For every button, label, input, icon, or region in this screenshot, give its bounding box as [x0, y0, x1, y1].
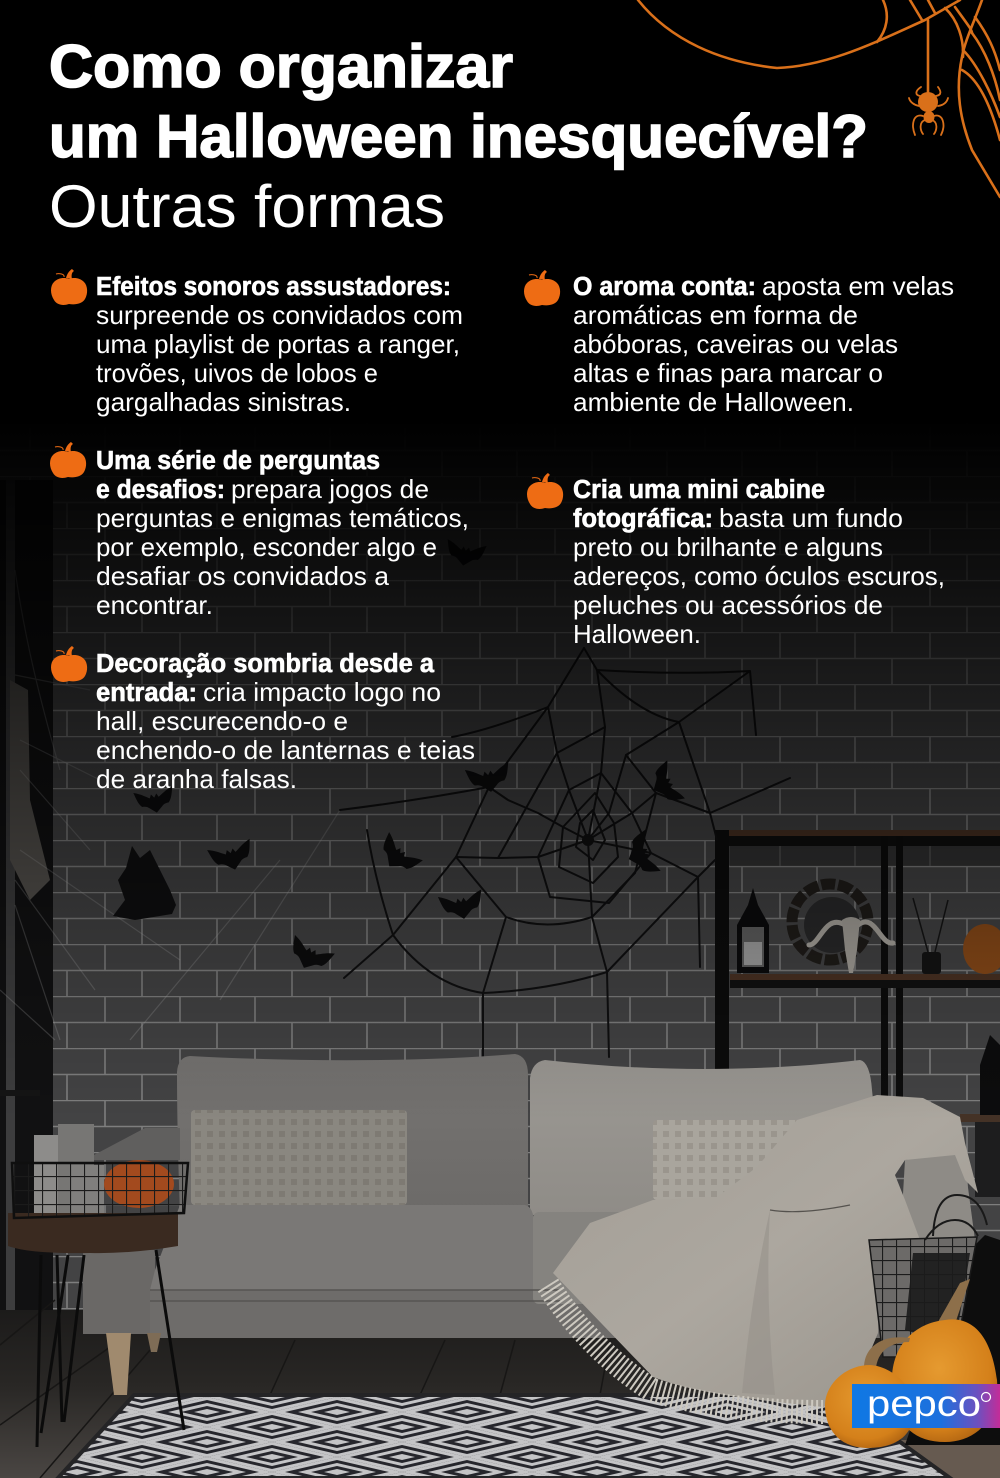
tip text: photo booth: fotográfica: — [573, 505, 713, 533]
sofa back cushion left — [177, 1054, 528, 1215]
title — [49, 33, 868, 240]
tip text: entrance decoration: hall, escurecendo-o e — [96, 706, 348, 736]
sofa — [83, 1054, 975, 1395]
sofa seat cushion right — [533, 1212, 833, 1304]
icon: pumpkin — [51, 269, 87, 305]
title: Como organizar — [49, 33, 513, 100]
wire basket right — [869, 1195, 987, 1357]
lower shelf lantern — [980, 1035, 1000, 1115]
shelf: lantern — [737, 888, 769, 973]
throw blanket — [548, 1095, 978, 1412]
tip text: aroma: aromáticas em forma de — [573, 300, 858, 330]
tip text: photo booth — [573, 476, 945, 649]
tip text: sound effects — [96, 273, 463, 417]
tip text: sound effects: Efeitos sonoros assustadores: — [96, 273, 451, 301]
tip text: questions and challenges: e desafios: — [96, 476, 225, 504]
tip text: questions and challenges: encontrar. — [96, 590, 213, 620]
tip text: questions and challenges — [96, 447, 469, 620]
spider — [909, 87, 948, 135]
tip text: entrance decoration — [96, 650, 475, 794]
shelf: reed diffuser — [913, 898, 948, 974]
tip text: questions and challenges: desafiar os convidados a — [96, 561, 390, 591]
pumpkins bottom right — [825, 1279, 997, 1448]
orange corner spider web — [638, 0, 1000, 197]
small pumpkin — [825, 1337, 915, 1448]
tip text: questions and challenges: por exemplo, esconder algo e — [96, 532, 437, 562]
rug — [58, 1395, 950, 1478]
tip: entrance decoration — [51, 646, 475, 794]
tip text: entrance decoration: Decoração sombria desde a — [96, 650, 435, 678]
tip text: sound effects: surpreende os convidados com — [96, 300, 463, 330]
tip text: questions and challenges: perguntas e enigmas temáticos, — [96, 503, 469, 533]
icon: pumpkin — [51, 646, 87, 682]
tip text: entrance decoration: entrada: — [96, 679, 197, 707]
sofa seat cushion left — [150, 1205, 534, 1290]
pale fake cobweb strands — [0, 570, 340, 1040]
tip text: photo booth: preto ou brilhante e alguns — [573, 532, 883, 562]
table top — [8, 1213, 178, 1253]
floor — [0, 1300, 1000, 1478]
shelving unit — [715, 830, 1000, 1197]
table legs — [37, 1250, 184, 1447]
tip text: questions and challenges: prepara jogos de — [231, 474, 429, 504]
right sofa arm — [900, 1150, 975, 1245]
left pillow — [191, 1110, 407, 1205]
tip text: aroma: O aroma conta: — [573, 273, 756, 301]
sofa legs — [106, 1333, 161, 1395]
sofa back cushion right — [530, 1060, 885, 1215]
sofa left arm — [83, 1250, 155, 1334]
tip text: aroma: abóboras, caveiras ou velas — [573, 329, 898, 359]
shelf: wreath and ram skull — [792, 884, 893, 973]
shelf: pumpkin — [963, 924, 1000, 974]
right pillow — [653, 1120, 803, 1200]
tip text: sound effects: uma playlist de portas a ranger, — [96, 329, 460, 359]
icon: pumpkin — [524, 270, 560, 306]
big pumpkin — [892, 1279, 997, 1442]
tip text: sound effects: gargalhadas sinistras. — [96, 387, 351, 417]
tip text: photo booth: peluches ou acessórios de — [573, 590, 883, 620]
bats on wall — [133, 539, 685, 977]
left window frame — [0, 480, 53, 1310]
basket contents — [34, 1124, 180, 1213]
tip text: aroma — [573, 271, 954, 417]
tip text: entrance decoration: enchendo-o de lanternas e teias — [96, 735, 475, 765]
tip text: entrance decoration: de aranha falsas. — [96, 764, 297, 794]
tip text: photo booth: basta um fundo — [719, 503, 903, 533]
tip text: aroma: aposta em velas — [762, 271, 954, 301]
icon: pumpkin — [50, 442, 86, 478]
overlay: dark fade — [0, 0, 1000, 1120]
spider thread — [927, 20, 929, 92]
tip text: aroma: ambiente de Halloween. — [573, 387, 854, 417]
tip: sound effects — [51, 269, 463, 417]
tip text: aroma: altas e finas para marcar o — [573, 358, 883, 388]
title: Outras formas — [49, 173, 445, 240]
tip: photo booth — [527, 473, 945, 649]
tip text: entrance decoration: cria impacto logo no — [203, 677, 441, 707]
side table with basket — [8, 1124, 188, 1447]
tip: questions and challenges — [50, 442, 469, 620]
tip text: photo booth: Cria uma mini cabine — [573, 476, 825, 504]
sofa base — [150, 1290, 950, 1338]
icon: pumpkin — [527, 473, 563, 509]
tip text: sound effects: trovões, uivos de lobos e — [96, 358, 378, 388]
pepco logo — [852, 1383, 1000, 1428]
pepco logo: pepco — [867, 1383, 981, 1424]
tip: aroma — [524, 270, 954, 417]
title: um Halloween inesquecível? — [49, 103, 868, 170]
tip text: photo booth: adereços, como óculos escuros, — [573, 561, 945, 591]
tip text: photo booth: Halloween. — [573, 619, 701, 649]
tip text: questions and challenges: Uma série de perguntas — [96, 447, 380, 475]
wire basket — [12, 1163, 188, 1218]
fur and dark items right — [905, 1235, 1000, 1445]
ghost ship silhouette — [113, 846, 176, 920]
blanket fringe — [548, 1285, 826, 1412]
wall spider web — [340, 648, 790, 1057]
